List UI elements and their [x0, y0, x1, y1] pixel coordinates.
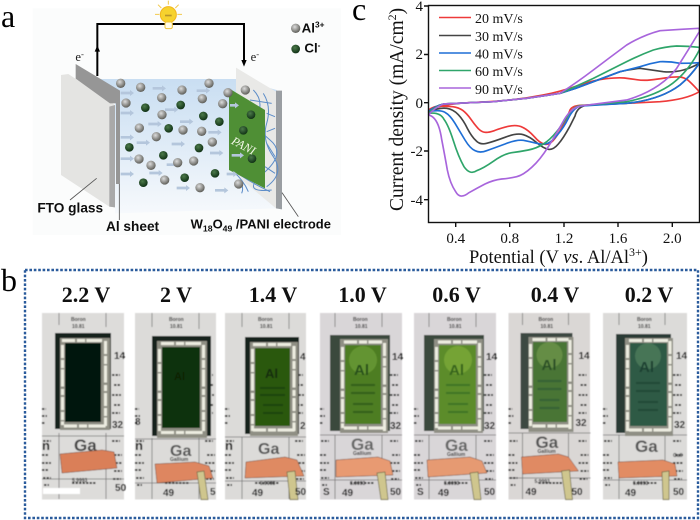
- panel a: device schematic: [33, 1, 341, 235]
- photo: 0.6 V: 32: [484, 421, 496, 432]
- legend: 60 mV/s: [475, 65, 523, 80]
- voltage labels: 0.6 V: [432, 282, 481, 307]
- photo: 0.4 V: 5.9993: [534, 479, 550, 485]
- photo: 1.0 V: 49: [342, 488, 354, 499]
- panel b: dotted frame: [25, 270, 698, 518]
- legend: [291, 19, 325, 56]
- photo: 1.0 V: Al: [354, 362, 369, 379]
- photo: 0.6 V: 10.81: [449, 324, 462, 330]
- photo: 1.4 V: 49: [252, 488, 264, 499]
- photo: 1.4 V: Ga: [258, 441, 279, 458]
- legend: -: [318, 40, 321, 50]
- plot frame and ticks: [424, 6, 700, 227]
- y axis ticks: 2: [416, 47, 423, 63]
- voltage labels: 1.0 V: [338, 282, 387, 307]
- x axis title: ): [642, 248, 648, 268]
- y axis title: ): [387, 8, 408, 14]
- photo: 2.2 V: n: [42, 438, 50, 453]
- photo: 2.2 V: [42, 313, 127, 500]
- callout labels: FTO glass: [37, 200, 104, 215]
- photo: 0.2 V: Ga: [635, 437, 658, 456]
- photo: 1.0 V: 5.9993: [350, 481, 366, 487]
- PANI film: [228, 88, 265, 188]
- photo: 1.0 V: [320, 313, 404, 500]
- photo: 1.4 V: 5.9993: [260, 481, 276, 487]
- CV curves: [428, 28, 699, 196]
- photo: 1.4 V: [225, 313, 307, 500]
- photo: 2 V: Boron: [169, 317, 184, 323]
- photo: 1.4 V: 50: [295, 487, 307, 498]
- photo: 0.2 V: 50: [673, 487, 685, 498]
- legend: 90 mV/s: [475, 83, 523, 98]
- photo: 2.2 V: 10.81: [72, 324, 85, 330]
- photo: 0.2 V: [603, 313, 688, 500]
- legend: Al: [302, 21, 315, 36]
- photo: 0.6 V: 50: [484, 487, 496, 498]
- electron labels: e: [251, 50, 256, 64]
- photo: 0.4 V: 49: [526, 487, 537, 498]
- photo: 2 V: Al: [174, 371, 185, 383]
- x axis title: 3+: [629, 245, 642, 259]
- photo: 1.4 V: n: [225, 438, 233, 453]
- x axis ticks: 0.4: [446, 231, 466, 247]
- Al sheet: [76, 64, 120, 184]
- legend: 40 mV/s: [475, 48, 523, 62]
- photo: 0.6 V: 49: [438, 488, 450, 499]
- y axis ticks: -2: [410, 144, 423, 160]
- x axis title: Potential (V vs. Al/Al: [469, 248, 629, 268]
- PANI film: PANI: [228, 133, 259, 158]
- photo: 1.0 V: Boron: [353, 317, 368, 323]
- callout labels: 49: [223, 223, 232, 233]
- photo: 0.4 V: 50: [572, 487, 583, 498]
- photo: 0.4 V: [508, 313, 590, 500]
- photo: 0.4 V: Al: [542, 357, 556, 374]
- photo: 1.0 V: 32: [390, 421, 402, 432]
- voltage labels: 0.2 V: [625, 282, 673, 307]
- red 20 mV/s curve: [428, 77, 699, 144]
- callout labels: W: [191, 217, 203, 232]
- photo: 0.6 V: [414, 313, 498, 500]
- photo: 0.4 V: 14: [578, 351, 590, 362]
- Al3+ ions: [116, 79, 250, 192]
- callout labels: 18: [203, 223, 213, 233]
- external circuit wire: [95, 24, 247, 76]
- photo: 1.0 V: 14: [392, 352, 404, 363]
- voltage labels: [62, 282, 673, 307]
- right electrode backing: [236, 68, 282, 209]
- electron labels: [75, 49, 259, 64]
- legend: [439, 12, 523, 98]
- voltage labels: 1.4 V: [249, 282, 297, 307]
- green 60 mV/s curve: [428, 46, 699, 172]
- photo: 2 V: 10.81: [170, 324, 183, 330]
- photo: 0.2 V: Al: [639, 359, 654, 376]
- x axis ticks: [446, 231, 682, 247]
- x axis ticks: 2.0: [663, 231, 682, 247]
- legend: 30 mV/s: [475, 30, 523, 45]
- nanofibres: [233, 90, 278, 193]
- photo: 2.2 V: 5.9993: [72, 478, 88, 484]
- electron labels: -: [81, 49, 84, 59]
- photo: 1.0 V: 50: [390, 487, 402, 498]
- photo: 1.0 V: Gallium: [353, 451, 372, 457]
- photo: 2 V: n: [135, 438, 143, 453]
- photo: 0.2 V: 10.81: [638, 324, 651, 330]
- blue 40 mV/s curve: [428, 62, 699, 152]
- x axis ticks: 1.6: [609, 231, 628, 247]
- callout labels: /PANI electrode: [232, 217, 331, 232]
- grey 30 mV/s curve: [428, 63, 699, 149]
- photo: 2 V: [135, 313, 216, 500]
- photo: 1.4 V: 4: [300, 352, 306, 363]
- y axis ticks: 0: [416, 96, 423, 112]
- legend: Cl: [304, 41, 318, 56]
- photo: 0.6 V: 5.9993: [444, 481, 460, 487]
- photo: 2.2 V: 50: [115, 483, 127, 494]
- photo: 0.4 V: 10.81: [540, 324, 553, 330]
- ion flow arrows: [121, 85, 244, 193]
- y axis ticks: -4: [410, 193, 423, 209]
- photo: 2.2 V: Ga: [74, 436, 97, 455]
- photo: 1.4 V: Al: [265, 366, 278, 381]
- legend: 3+: [315, 19, 325, 29]
- photo: 1.0 V: Ga: [351, 435, 374, 454]
- electrolyte: [98, 79, 277, 213]
- photo: 2 V: 5: [210, 487, 216, 498]
- y axis ticks: [410, 0, 424, 209]
- photo: 1.4 V: Boron: [258, 317, 273, 323]
- callout labels: O: [213, 217, 223, 232]
- x axis ticks: 0.8: [500, 231, 519, 247]
- photo: 0.6 V: Gallium: [447, 452, 466, 458]
- photo: 0.6 V: Ga: [445, 436, 468, 455]
- photo: 0.2 V: 49: [625, 488, 637, 499]
- photo: 0.4 V: 32: [576, 418, 587, 429]
- photo: 2.2 V: 32: [112, 420, 124, 431]
- photo: 1.4 V: 10.81: [260, 324, 273, 330]
- y axis title: 2: [385, 14, 399, 20]
- photo: 2.2 V: 14: [114, 351, 126, 362]
- callout labels: [37, 178, 331, 234]
- photo: 1.0 V: 10.81: [355, 324, 368, 330]
- photo: 2 V: Gallium: [170, 457, 189, 463]
- FTO glass plate: [61, 74, 115, 207]
- photo: 0.6 V: 14: [486, 352, 498, 363]
- electron labels: -: [256, 49, 259, 59]
- photo: 0.2 V: Gall: [673, 453, 683, 459]
- x axis ticks: 1.2: [555, 231, 573, 247]
- photo: 2.2 V: Boron: [71, 317, 86, 323]
- photo: 0.2 V: 14: [676, 351, 688, 362]
- voltage labels: 2 V: [160, 282, 192, 307]
- photo: 2 V: 8: [135, 417, 141, 428]
- electron labels: e: [75, 50, 81, 64]
- photo: 0.2 V: 32: [674, 420, 686, 431]
- photo: 0.2 V: 5.9993: [633, 481, 649, 487]
- panel label b: b: [1, 262, 17, 298]
- photo: 0.6 V: Al: [449, 362, 464, 379]
- icon: light bulb: [155, 1, 182, 29]
- voltage labels: 2.2 V: [62, 282, 110, 307]
- photo: 0.6 V: S: [417, 487, 424, 498]
- photo: 0.2 V: Boron: [637, 317, 652, 323]
- Cl- ions: [125, 101, 256, 187]
- photo: 1.0 V: S: [323, 487, 330, 498]
- purple 90 mV/s curve: [428, 28, 699, 196]
- photo: 1.4 V: 2: [300, 421, 306, 432]
- photo: 2 V: 49: [163, 488, 175, 499]
- photo: 0.4 V: Boron: [538, 317, 553, 323]
- y axis title: Current density (mA/cm: [387, 20, 408, 211]
- photo: 0.6 V: Boron: [447, 317, 462, 323]
- panel c: cyclic voltammetry chart: [385, 0, 700, 268]
- photo: 2 V: Ga: [170, 443, 191, 460]
- callout labels: Al sheet: [106, 219, 160, 234]
- photo: 0.4 V: Gallium: [538, 449, 556, 455]
- photo: 0.4 V: Ga: [536, 433, 559, 452]
- voltage labels: 0.4 V: [531, 282, 579, 307]
- legend: 20 mV/s: [475, 12, 523, 27]
